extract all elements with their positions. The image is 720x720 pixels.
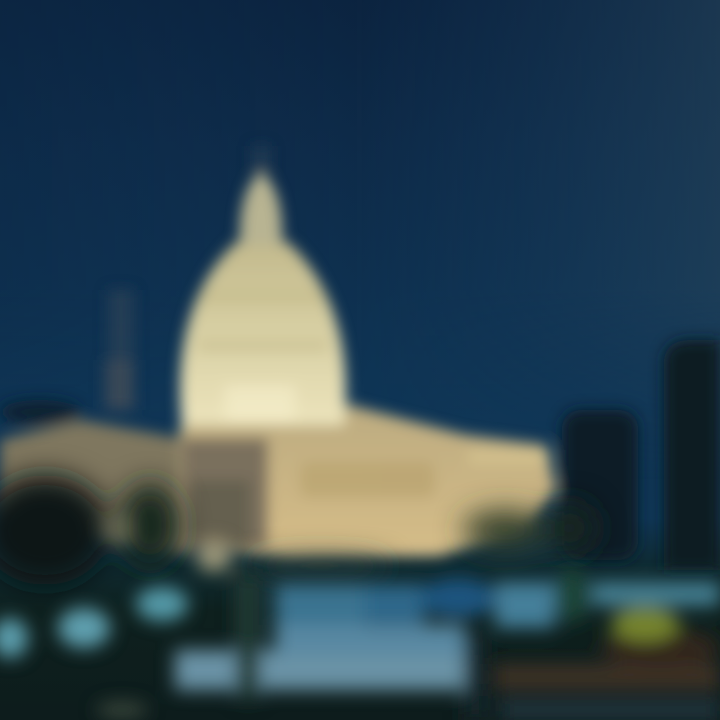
reflecting pool water [0,578,720,690]
warm planter and green shrub [495,607,720,720]
right dark towers [562,340,720,570]
right wing [180,405,556,558]
dome [180,242,346,425]
dome lantern [240,172,282,245]
right foreground shrubs [250,502,596,574]
blurred foreground [0,511,720,720]
warm lamp glow [96,511,232,718]
wing window bands [300,450,550,498]
left foreground trees [0,475,180,585]
foreground lamp posts and figures [236,567,589,720]
blurred scene: skyline and building [0,146,720,570]
dome shading ribs [198,290,328,421]
left wing in shadow [0,420,190,555]
statue on top [252,146,270,172]
distant monument spire [104,290,134,410]
left distant treeline [0,400,80,424]
capitol building [0,146,556,558]
shadowed central portico [182,438,268,550]
